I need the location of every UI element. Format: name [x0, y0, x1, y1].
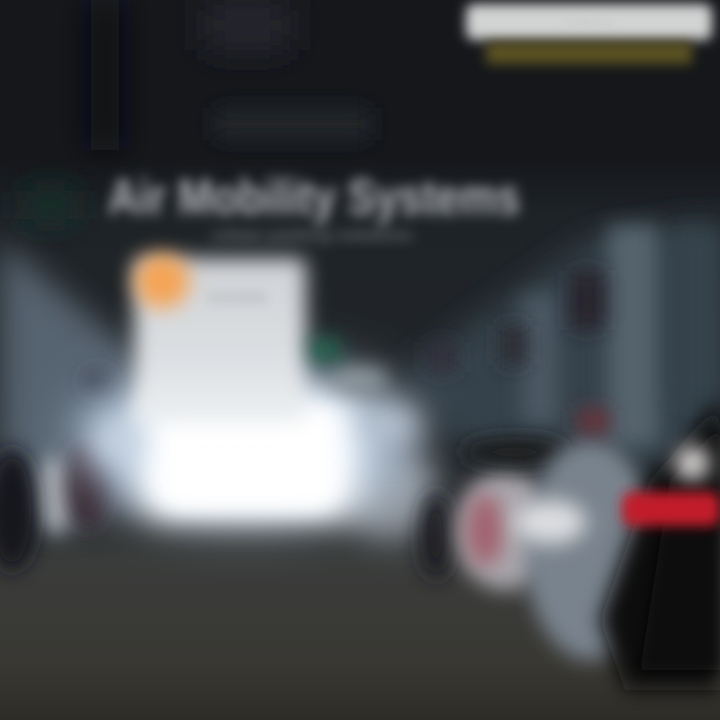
- left wall and parked cars: [0, 190, 150, 572]
- icon: orange circle: [135, 254, 189, 308]
- banner text: Featured: [565, 15, 613, 29]
- title: Air Mobility Systems: [108, 169, 520, 225]
- right wall and columns: [400, 220, 720, 470]
- right row of parked cars: [340, 410, 655, 660]
- bright light at end of tunnel: [80, 365, 422, 520]
- foreground car with red tail light: [600, 400, 720, 690]
- top-right banner: [466, 4, 712, 64]
- card text: Details: [208, 289, 268, 305]
- info card: [134, 258, 341, 423]
- accent: green marker: [309, 339, 341, 361]
- subtitle: Urban parking solutions: [212, 227, 412, 244]
